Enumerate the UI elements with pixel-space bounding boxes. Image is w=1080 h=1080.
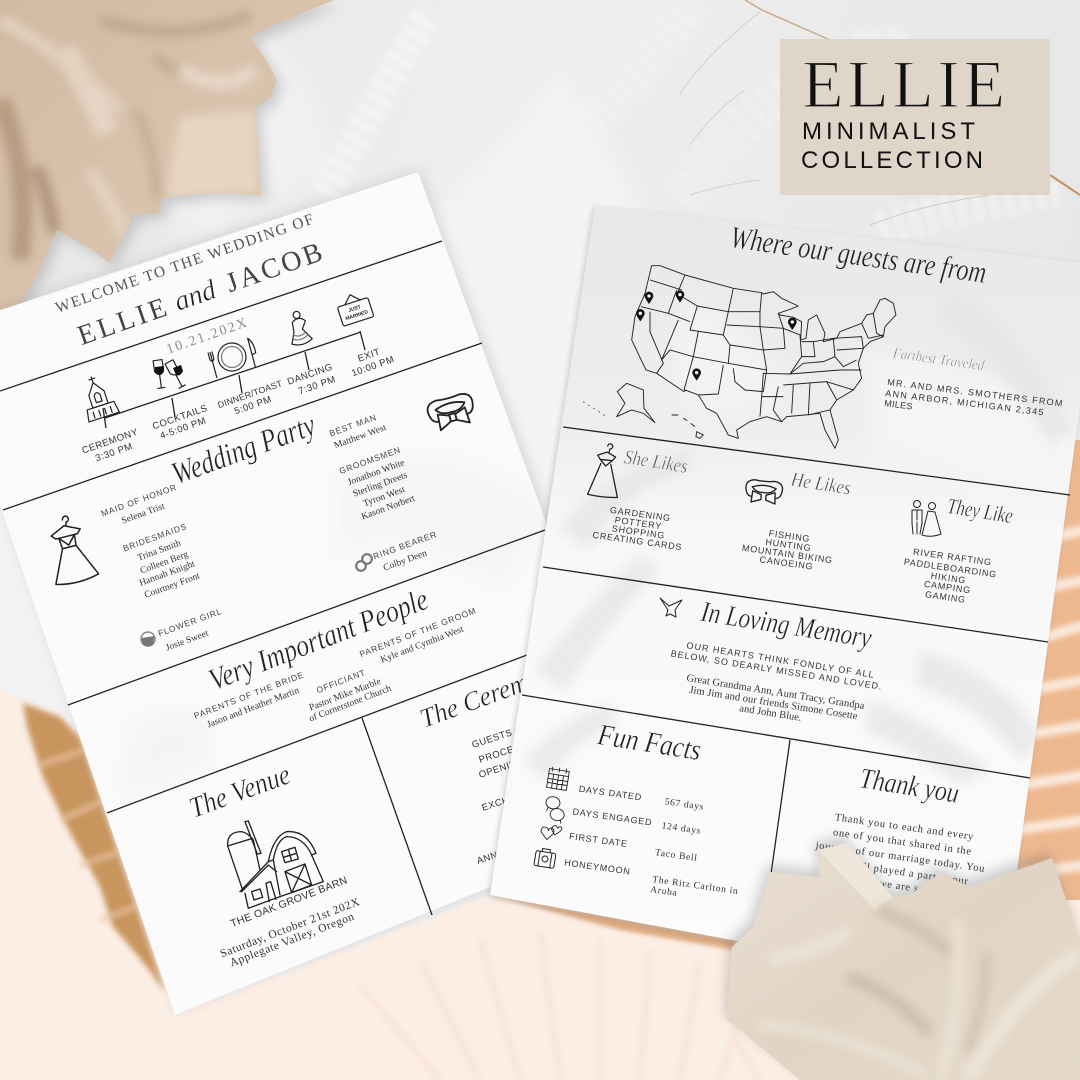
text: groom side of party: Jonathon White	[347, 458, 406, 488]
icon: dinner plate and cutlery	[207, 337, 259, 378]
text: very important people names: OFFICIANT	[315, 667, 367, 695]
decorative white ferns and twigs	[325, 0, 1080, 230]
timeline	[103, 331, 365, 428]
text: fun facts table: DAYS DATED	[578, 784, 643, 802]
text: memorial message: BELOW, SO DEARLY MISSED AND LOVED.	[670, 648, 883, 692]
text: very important people names: Kyle and Cynthia West	[379, 625, 465, 666]
icon: dress for she likes	[587, 442, 623, 498]
heading: couple names: and	[170, 274, 221, 318]
timeline labels: 7:30 PM	[297, 374, 337, 397]
text: groom side of party: Sterling Dreets	[352, 471, 409, 500]
text: bride side of party: Trina Smith	[136, 539, 183, 564]
text: he likes list	[741, 528, 833, 572]
text: groom side of party: Tyron West	[362, 485, 407, 509]
fabric: bottom right draped cream cloth	[724, 836, 1080, 1080]
title: ELLIE: ELLIE	[802, 46, 1005, 122]
text: thank you message: story and we are so grateful	[830, 872, 966, 901]
icon: couple for they like	[912, 500, 941, 536]
text: fun facts table: 567 days	[664, 797, 705, 813]
icon: dancing couple	[284, 309, 313, 347]
heading: the venue: The Venue	[185, 759, 295, 825]
heading: very important people: Very Important People	[204, 581, 433, 697]
icon: bow tie	[426, 392, 478, 432]
icon: flower basket	[141, 632, 155, 646]
text: she likes list	[592, 505, 683, 552]
text: they like list	[903, 547, 998, 605]
text: very important people names: PARENTS OF THE GROOM	[358, 605, 478, 659]
timeline labels: 5:00 PM	[233, 394, 273, 417]
timeline labels: DINNER/TOAST	[216, 378, 284, 410]
heading: wedding party: Wedding Party	[167, 406, 320, 491]
icon: just married sign: JUST	[348, 304, 362, 314]
text: very important people names: Jason and Heather Martin	[206, 686, 301, 730]
text: thank you message	[814, 812, 986, 901]
icon: wine glasses	[153, 360, 186, 389]
date: 10.21.202X	[165, 316, 249, 358]
text: fun facts table: Aruba	[650, 885, 678, 899]
text: bride side of party: FLOWER GIRL	[157, 606, 223, 638]
text: ceremony order: EXCHANGE OF VOWS	[481, 770, 587, 814]
timeline labels: CEREMONY	[81, 427, 140, 457]
icon: dove	[660, 598, 682, 617]
icon: wedding rings	[356, 554, 372, 571]
text: memorial message: OUR HEARTS THINK FONDLY OF ALL	[686, 640, 875, 680]
text: bride side of party: Courtney Front	[143, 571, 202, 601]
text: venue details: Saturday, October 21st 202X	[219, 896, 362, 960]
text: thank you message: one of you that shared in the	[832, 827, 972, 858]
title badge: Ellie minimalist collection	[780, 39, 1050, 195]
text: groom side of party: Kason Norbert	[360, 494, 417, 522]
text: groom side of party: RING BEARER	[372, 529, 438, 561]
text: bride side of party: BRIDESMAIDS	[122, 521, 188, 553]
text: she likes list: CREATING CARDS	[592, 530, 683, 552]
text: very important people names	[192, 605, 478, 730]
text: ceremony order: PROCESSIONAL	[478, 730, 558, 766]
icon: suitcase	[534, 848, 556, 868]
text: groom side of party: Matthew West	[333, 423, 388, 451]
icon: barn	[228, 821, 323, 908]
text: ceremony order: GUESTS SEATED	[471, 714, 555, 751]
text: he likes list: HUNTING	[765, 537, 812, 553]
timeline labels: EXIT	[356, 347, 382, 365]
heading: farthest traveled: Farthest Traveled	[891, 346, 986, 374]
text: ceremony order: OPENING REMARKS	[478, 739, 577, 781]
text: fun facts table	[564, 784, 739, 899]
text: they like list: GAMING	[924, 589, 966, 605]
heading: the ceremony: The Ceremony	[416, 654, 567, 734]
text: bride side of party: Josie Sweet	[165, 629, 210, 653]
text: they like list: CAMPING	[923, 579, 972, 595]
icon: I do speech bubbles	[543, 796, 567, 824]
icon: just married sign	[335, 290, 374, 326]
panel: right guest information card	[488, 205, 1080, 992]
text: farthest traveled details: ANN ARBOR, MICHIGAN 2,345	[885, 388, 1045, 417]
heading: couple names: ELLIE	[74, 292, 171, 352]
text: groom side of party: Colby Deen	[382, 549, 429, 574]
panel: left wedding program card	[0, 170, 548, 1015]
text: thank you message: journey of our marriage today. You	[814, 840, 986, 875]
icon: calendar	[547, 767, 570, 790]
heading: they like: They Like	[946, 493, 1015, 528]
text: fun facts table: FIRST DATE	[568, 831, 628, 849]
text: memorial message: Jim Jim and our friends Simone Cosette	[689, 685, 859, 722]
text: fun facts table: Taco Bell	[654, 848, 698, 864]
text: farthest traveled details: MILES	[884, 398, 913, 411]
fabric: top left draped beige cloth	[0, 0, 334, 310]
text: fun facts table: DAYS ENGAGED	[572, 806, 653, 828]
icon: just married sign: MARRIED	[345, 309, 369, 322]
icon: map pins	[636, 290, 797, 381]
text: they like list: RIVER RAFTING	[912, 547, 992, 567]
text: memorial message: Great Grandma Ann, Aunt Tracy, Grandpa	[686, 673, 865, 712]
icon: hearts	[540, 824, 562, 842]
text: fun facts table: 124 days	[661, 821, 702, 837]
subtitle: minimalist: MINIMALIST	[802, 118, 975, 145]
text: fun facts table: HONEYMOON	[564, 857, 631, 877]
chart: US map with guest pins	[583, 266, 896, 448]
text: he likes list: CANOEING	[759, 554, 814, 572]
text: groom side of party	[328, 412, 438, 574]
text: memorial message: and John Blue.	[739, 703, 802, 724]
heading: where our guests are from: Where our guests are from	[728, 219, 989, 290]
text: she likes list: SHOPPING	[611, 523, 666, 541]
text: very important people names: PARENTS OF THE BRIDE	[192, 670, 305, 721]
text: farthest traveled details: MR. AND MRS. SMOTHERS FROM	[887, 377, 1064, 409]
text: ceremony order	[471, 714, 587, 867]
heading: couple names	[74, 237, 327, 352]
text: very important people names: of Cornerstone Church	[307, 683, 393, 724]
section divider lines	[522, 427, 1070, 895]
text: ceremony order: ANNOUNCEMENT	[476, 829, 562, 867]
heading: he likes: He Likes	[789, 468, 852, 500]
text: venue details: Applegate Valley, Oregon	[228, 911, 356, 969]
subtitle: collection: COLLECTION	[801, 147, 983, 174]
icon: wedding dress	[40, 512, 99, 587]
heading: she likes: She Likes	[623, 446, 689, 478]
icon: church	[76, 372, 119, 422]
text: bride side of party: Selena Trist	[120, 502, 167, 527]
text: very important people names: Pastor Mike Marble	[308, 677, 383, 713]
text: they like list: PADDLEBOARDING	[903, 557, 998, 580]
heading: fun facts: Fun Facts	[595, 718, 703, 767]
text: bride side of party: Colleen Berg	[139, 550, 190, 576]
heading: thank you: Thank you	[858, 762, 961, 810]
timeline labels: 10:00 PM	[350, 354, 396, 379]
text: memorial message	[670, 640, 883, 724]
heading: welcome: WELCOME TO THE WEDDING OF	[53, 211, 316, 317]
text: bride side of party: MAID OF HONOR	[100, 482, 178, 519]
text: he likes list: FISHING	[768, 528, 811, 544]
icon: bow tie for he likes	[745, 479, 783, 505]
text: bride side of party: Hannah Knight	[138, 559, 197, 589]
text: groom side of party: BEST MAN	[328, 412, 378, 438]
text: bride side of party	[100, 482, 223, 653]
text: venue details	[219, 874, 362, 969]
heading: couple names: JACOB	[222, 237, 327, 299]
timeline labels: 4-5:00 PM	[159, 415, 208, 442]
text: she likes list: GARDENING	[609, 505, 671, 523]
timeline labels: 3:30 PM	[94, 441, 134, 464]
section divider lines	[0, 241, 545, 915]
text: venue details: THE OAK GROVE BARN	[229, 874, 349, 930]
text: she likes list: POTTERY	[614, 515, 663, 531]
timeline labels: COCKTAILS	[151, 403, 209, 432]
text: fun facts table: The Ritz Carlton in	[652, 875, 739, 897]
text: they like list: HIKING	[930, 571, 967, 585]
timeline labels: DANCING	[286, 362, 334, 388]
text: groom side of party: GROOMSMEN	[338, 444, 402, 476]
text: thank you message: Thank you to each and every	[834, 812, 975, 843]
text: thank you message: have all played a part in our	[831, 858, 969, 888]
heading: in loving memory: In Loving Memory	[698, 596, 874, 654]
timeline labels	[81, 347, 396, 464]
text: he likes list: MOUNTAIN BIKING	[741, 543, 833, 565]
